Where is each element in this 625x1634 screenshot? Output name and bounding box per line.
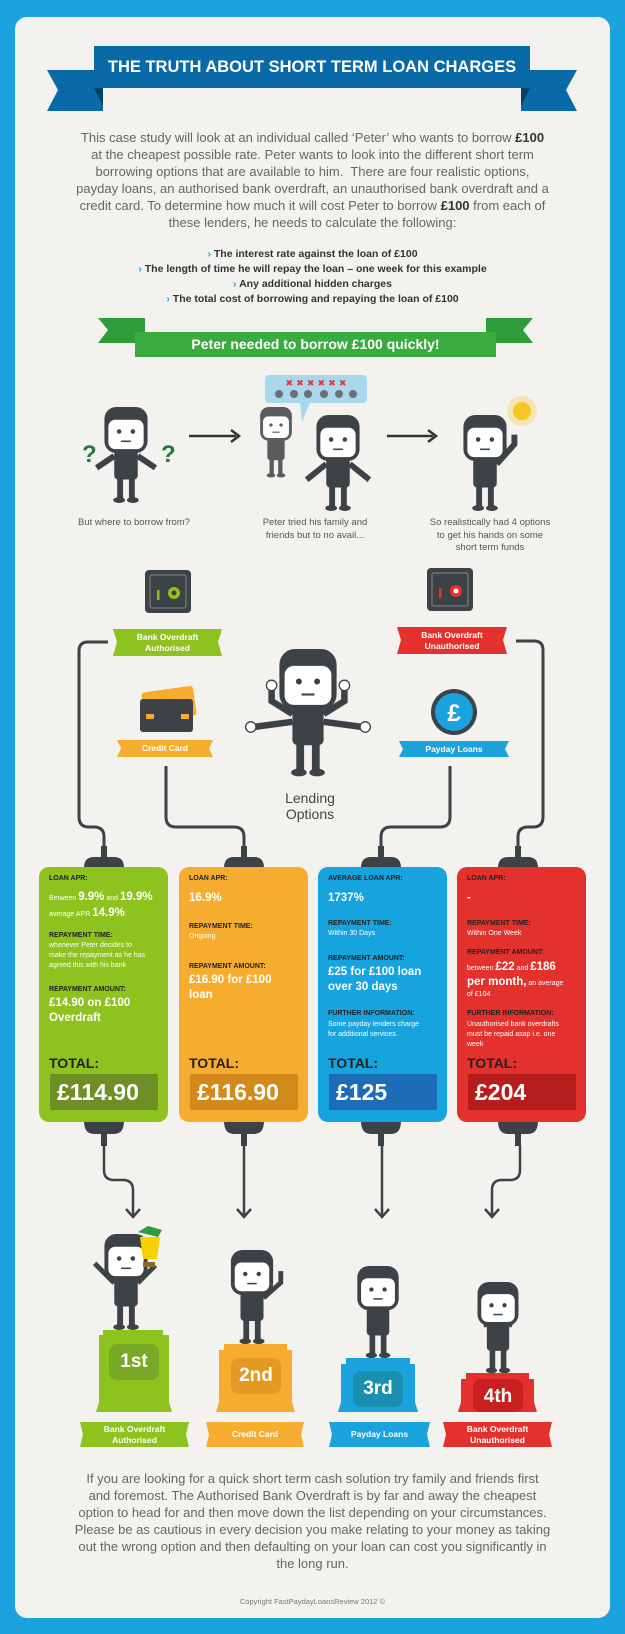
text: Unauthorised bbox=[470, 1435, 525, 1445]
bulb bbox=[513, 402, 531, 420]
text: friends but to no avail... bbox=[266, 530, 364, 540]
card: credit: £116.90 bbox=[197, 1079, 279, 1105]
text: ? bbox=[82, 441, 97, 468]
arrow 2 bbox=[387, 435, 433, 437]
card: authorised: Overdraft bbox=[49, 1012, 101, 1024]
green banner text: Peter needed to borrow £100 quickly! bbox=[191, 336, 440, 352]
card: credit: LOAN APR: bbox=[189, 875, 228, 882]
card: authorised: £114.90 bbox=[57, 1079, 139, 1105]
copyright: Copyright FastPaydayLoansReview 2012 © bbox=[240, 1597, 385, 1606]
card: unauthorised: TOTAL: bbox=[467, 1055, 517, 1071]
arrow 1 bbox=[189, 435, 236, 437]
safe unauthorised bbox=[427, 568, 473, 611]
card: credit: Ongoing bbox=[189, 933, 215, 940]
card: authorised: Between 9.9% and 19.9% bbox=[49, 891, 153, 903]
intro text: at the cheapest possible rate. Peter wants to look into the different short term bbox=[91, 147, 534, 162]
card: credit: REPAYMENT AMOUNT: bbox=[189, 963, 266, 970]
closing text: Please be as cautious in every decision you make relating to your money as taking bbox=[75, 1522, 550, 1537]
card: unauthorised: £204 bbox=[475, 1079, 526, 1105]
text: 2nd bbox=[239, 1365, 273, 1386]
card: payday: REPAYMENT AMOUNT: bbox=[328, 955, 405, 962]
card: unauthorised: REPAYMENT AMOUNT: bbox=[467, 949, 544, 956]
closing text: and foremost. The Authorised Bank Overdraft is by far and away the cheapest bbox=[89, 1488, 536, 1503]
card: payday: REPAYMENT TIME: bbox=[328, 920, 392, 927]
card: unauthorised: between £22 and £186 bbox=[467, 961, 556, 973]
card: payday: for additional services. bbox=[328, 1031, 398, 1038]
card: payday: over 30 days bbox=[328, 981, 398, 993]
card: payday: Within 30 Days bbox=[328, 930, 375, 937]
text: Payday Loans bbox=[425, 744, 483, 754]
bottom ribbons bbox=[80, 1422, 189, 1447]
podium numbers: 1st bbox=[120, 1351, 148, 1372]
intro text: credit card. To determine how much it will cost Peter to borrow £100 from each of bbox=[80, 198, 545, 213]
closing text: out the wrong option and then defaulting on your loan can cost you significantly in bbox=[78, 1539, 547, 1554]
card: payday: AVERAGE LOAN APR: bbox=[328, 875, 403, 882]
card: payday: 1737% bbox=[328, 892, 364, 904]
cables top bbox=[79, 641, 543, 852]
card: payday: Some payday lenders charge bbox=[328, 1021, 419, 1028]
closing text: If you are looking for a quick short term cash solution try family and friends first bbox=[86, 1471, 539, 1486]
text: ✖ ✖ ✖ ✖ ✖ ✖ bbox=[286, 379, 346, 389]
text: Credit Card bbox=[142, 743, 188, 753]
card: unauthorised: week bbox=[467, 1041, 483, 1048]
card: authorised: make the repayment as he has bbox=[49, 952, 145, 959]
card: unauthorised: - bbox=[467, 892, 471, 904]
intro text: these lenders, he needs to calculate the following: bbox=[169, 215, 456, 230]
figure: friend bbox=[260, 407, 292, 478]
card: credit: 16.9% bbox=[189, 892, 222, 904]
card: unauthorised: REPAYMENT TIME: bbox=[467, 920, 531, 927]
podium numbers bbox=[109, 1344, 159, 1380]
text: ? bbox=[161, 441, 176, 468]
label ribbons bbox=[113, 629, 222, 656]
text: 3rd bbox=[363, 1378, 393, 1399]
text: So realistically had 4 options bbox=[430, 517, 550, 528]
lending options label bbox=[285, 790, 335, 822]
podium labels bbox=[104, 1424, 166, 1445]
text: Credit Card bbox=[232, 1429, 278, 1439]
card: credit: REPAYMENT TIME: bbox=[189, 923, 253, 930]
card: payday bbox=[318, 867, 447, 1122]
card: unauthorised: must be repaid asap i.e. one bbox=[467, 1031, 555, 1038]
card: payday: FURTHER INFORMATION: bbox=[328, 1010, 415, 1017]
card: authorised: REPAYMENT AMOUNT: bbox=[49, 986, 126, 993]
card: payday: £125 bbox=[336, 1079, 387, 1105]
label texts: Authorised bbox=[145, 643, 190, 653]
bullet list: › The total cost of borrowing and repaying the loan of £100 bbox=[166, 293, 459, 305]
bullet list: › Any additional hidden charges bbox=[233, 278, 392, 290]
credit card bbox=[141, 686, 197, 722]
label texts bbox=[137, 632, 198, 653]
card: authorised: whenever Peter decides to bbox=[49, 942, 132, 949]
title ribbon shapes bbox=[47, 70, 103, 111]
figure: idea peter bbox=[463, 415, 514, 511]
card: authorised: TOTAL: bbox=[49, 1055, 99, 1071]
intro text bbox=[76, 130, 549, 230]
text: £ bbox=[447, 700, 461, 727]
central figure bbox=[246, 649, 370, 776]
captions: But where to borrow from? bbox=[78, 517, 190, 528]
text: 4th bbox=[484, 1386, 512, 1407]
card: unauthorised bbox=[457, 867, 586, 1122]
card: unauthorised: Unauthorised bank overdrafts bbox=[467, 1021, 559, 1028]
closing text: option to head for and then move down the list depending on your circumstances. bbox=[78, 1505, 547, 1520]
card: credit: £16.90 for £100 bbox=[189, 974, 271, 986]
bullet list bbox=[138, 248, 487, 305]
card: payday: TOTAL: bbox=[328, 1055, 378, 1071]
closing text: the long run. bbox=[276, 1556, 349, 1571]
card: authorised: REPAYMENT TIME: bbox=[49, 932, 113, 939]
text: Unauthorised bbox=[425, 641, 479, 651]
card: authorised: agreed this with his bank bbox=[49, 962, 126, 969]
text: Payday Loans bbox=[351, 1429, 408, 1439]
card: authorised: LOAN APR: bbox=[49, 875, 88, 882]
text: Peter tried his family and bbox=[263, 517, 367, 528]
arrows down bbox=[104, 1146, 520, 1217]
closing text bbox=[75, 1471, 550, 1571]
label texts: Bank Overdraft bbox=[137, 632, 198, 642]
podium labels: Authorised bbox=[112, 1435, 157, 1445]
title: THE TRUTH ABOUT SHORT TERM LOAN CHARGES bbox=[108, 58, 516, 76]
text: Bank Overdraft bbox=[421, 630, 483, 640]
safe authorised bbox=[145, 570, 191, 613]
card: payday: £25 for £100 loan bbox=[328, 966, 421, 978]
text: short term funds bbox=[456, 542, 524, 553]
payday coin bbox=[431, 689, 477, 735]
card: unauthorised: of £104 bbox=[467, 991, 490, 998]
card: unauthorised: Within One Week bbox=[467, 930, 521, 937]
card: credit bbox=[179, 867, 308, 1122]
text: to get his hands on some bbox=[437, 530, 543, 540]
figure: confused peter bbox=[97, 407, 155, 503]
podium figures bbox=[95, 1234, 155, 1330]
figure: peter shrug bbox=[307, 415, 369, 511]
intro text: This case study will look at an individual called ‘Peter’ who wants to borrow £100 bbox=[81, 130, 544, 145]
bullet list: › The length of time he will repay the loan – one week for this example bbox=[138, 263, 487, 275]
card: unauthorised: FURTHER INFORMATION: bbox=[467, 1010, 554, 1017]
card: unauthorised: LOAN APR: bbox=[467, 875, 506, 882]
card: authorised: average APR 14.9% bbox=[49, 907, 125, 919]
card: authorised bbox=[39, 867, 168, 1122]
lending options label: Options bbox=[286, 806, 334, 822]
bullet list: › The interest rate against the loan of £100 bbox=[207, 248, 418, 260]
text: Bank Overdraft bbox=[467, 1424, 528, 1434]
lending options label: Lending bbox=[285, 790, 335, 806]
green ribbon shapes bbox=[98, 318, 145, 343]
card: credit: TOTAL: bbox=[189, 1055, 239, 1071]
card: authorised: £14.90 on £100 bbox=[49, 997, 130, 1009]
podiums bbox=[96, 1330, 172, 1412]
podium labels: Bank Overdraft bbox=[104, 1424, 165, 1434]
card: credit: loan bbox=[189, 989, 213, 1001]
intro text: payday loans, an authorised bank overdraft, an unauthorised bank overdraft and a bbox=[76, 181, 549, 196]
card: unauthorised: per month, an average bbox=[467, 976, 563, 988]
intro text: borrowing options that are available to him. There are four realistic options, bbox=[95, 164, 530, 179]
speech bubble with friends bbox=[265, 375, 367, 403]
